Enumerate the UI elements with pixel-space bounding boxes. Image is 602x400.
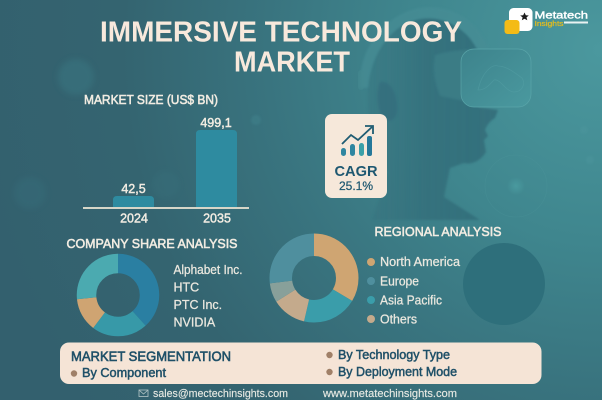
- company list: PTC Inc.: [174, 298, 222, 312]
- company share donut chart: [86, 264, 150, 326]
- regional analysis heading: REGIONAL ANALYSIS: [374, 224, 502, 239]
- chart heading: MARKET SIZE (US$ BN): [84, 92, 218, 107]
- icon: envelope: [139, 390, 148, 396]
- bar 2035: [196, 116, 237, 226]
- company share analysis heading: COMPANY SHARE ANALYSIS: [66, 236, 238, 251]
- bar 2024: 2024: [120, 212, 148, 226]
- regional legend: [367, 255, 460, 326]
- segment: by component: By Component: [82, 365, 166, 380]
- company list: Alphabet Inc.: [174, 263, 242, 277]
- contact: email: sales@mectechinsights.com: [153, 388, 288, 400]
- title: IMMERSIVE TECHNOLOGY: [100, 16, 462, 48]
- company list: HTC: [174, 280, 199, 294]
- market size bar chart: [83, 92, 249, 226]
- cagr card: 25.1%: [339, 179, 373, 193]
- regional legend: Europe: [380, 274, 419, 288]
- regional donut chart: [281, 245, 347, 311]
- bar 2035: 499,1: [200, 116, 232, 130]
- title: [100, 16, 462, 78]
- company list: [174, 263, 242, 330]
- company list: NVIDIA: [174, 316, 216, 330]
- logo: Metatech Insights: [504, 8, 588, 34]
- bar 2035: 2035: [203, 212, 231, 226]
- cagr card: CAGR: [334, 163, 378, 180]
- bar 2024: [113, 182, 154, 226]
- logo text: Metatech: [534, 10, 588, 22]
- bar 2024: 42,5: [121, 182, 146, 196]
- logo: Metatech Insights: Insights: [534, 19, 564, 28]
- market segmentation panel: [60, 342, 542, 384]
- vr headset figure: [358, 7, 531, 220]
- icon: growth chart: [341, 126, 373, 156]
- regional legend: Asia Pacific: [380, 294, 442, 308]
- logo icon: [504, 8, 532, 34]
- segment: by deployment mode: By Deployment Mode: [338, 364, 457, 379]
- title: MARKET: [234, 46, 350, 78]
- regional legend: Others: [380, 312, 417, 326]
- segmentation heading: MARKET SEGMENTATION: [71, 348, 231, 364]
- cagr card: [325, 114, 387, 198]
- regional legend: North America: [380, 255, 460, 269]
- contact: website: www.metatechinsights.com: [322, 388, 457, 400]
- segment: by technology type: By Technology Type: [338, 347, 450, 362]
